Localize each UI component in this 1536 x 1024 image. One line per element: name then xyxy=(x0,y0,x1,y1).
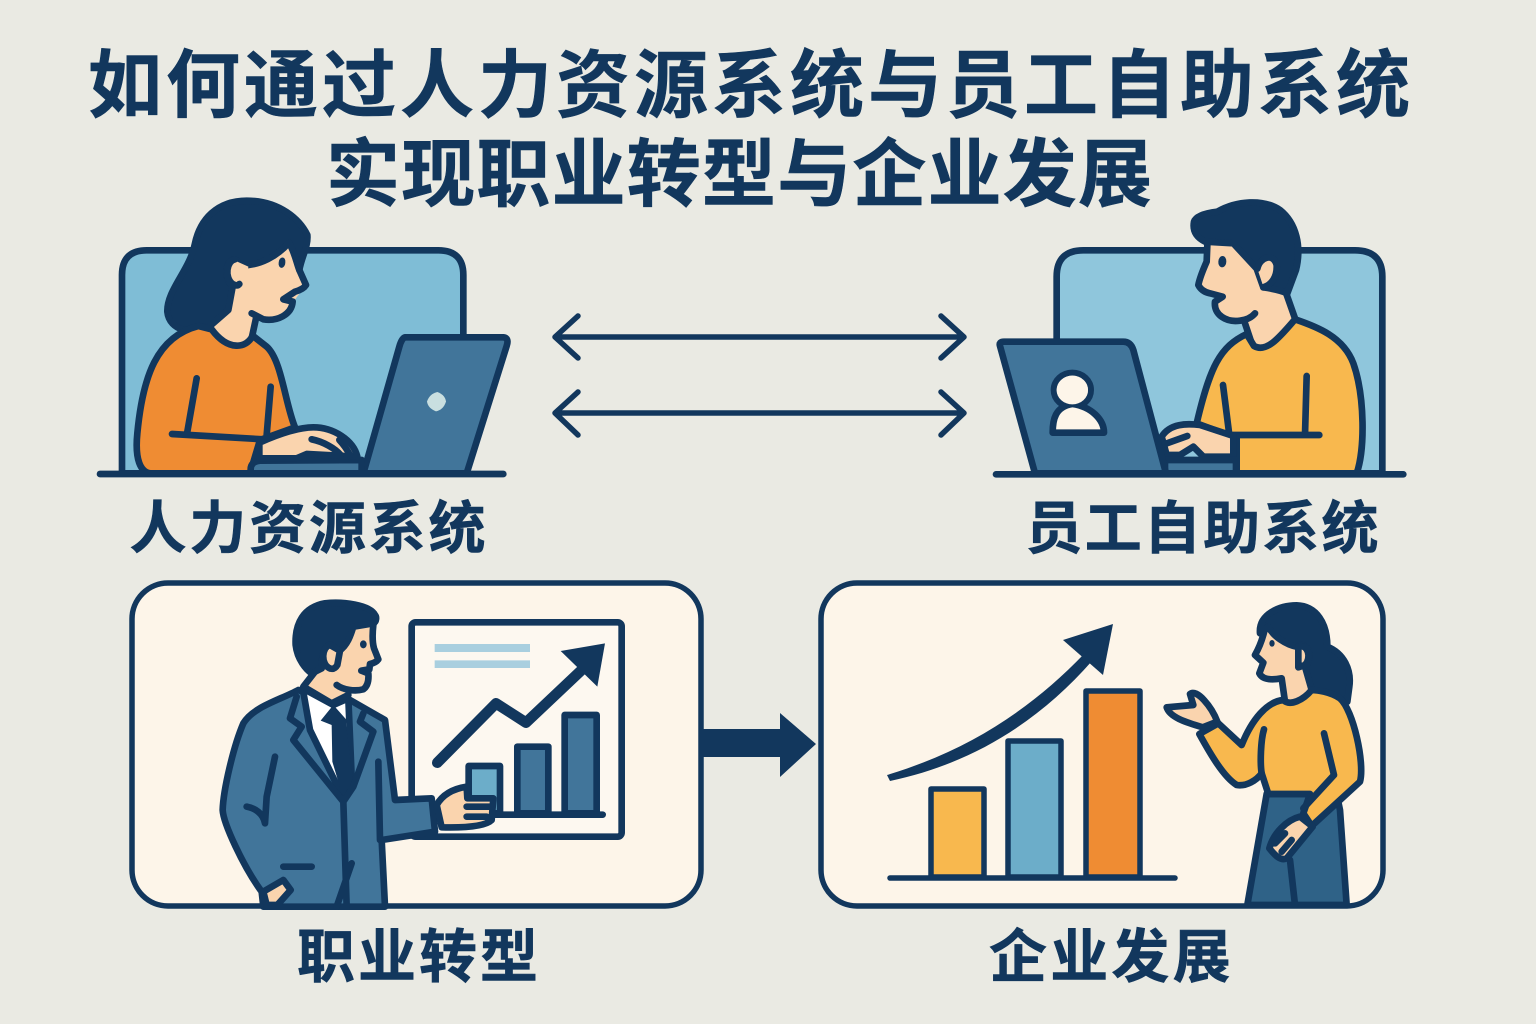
title: 实现职业转型与企业发展 xyxy=(326,133,1153,216)
label: career transformation: 职业转型 xyxy=(297,925,541,990)
arrow: career transformation to enterprise development xyxy=(703,713,816,777)
woman at laptop xyxy=(137,201,362,473)
chart board xyxy=(412,622,622,837)
title: 如何通过人力资源系统与员工自助系统 xyxy=(88,44,1414,127)
laptop with user icon xyxy=(1000,342,1166,473)
desk line xyxy=(996,464,1403,484)
man at laptop xyxy=(1162,202,1363,473)
woman gesturing xyxy=(1167,605,1361,905)
label: employee self-service system: 员工自助系统 xyxy=(1026,497,1381,561)
blue backdrop xyxy=(1057,250,1382,473)
bar chart with rising arrow xyxy=(887,624,1175,878)
panel: enterprise development xyxy=(821,583,1383,906)
laptop with logo xyxy=(363,337,507,473)
blue backdrop xyxy=(122,250,463,473)
panel: career transformation xyxy=(132,583,701,907)
man in suit xyxy=(223,603,493,907)
desk line xyxy=(100,464,503,484)
panel: HR system illustration xyxy=(100,201,507,474)
title xyxy=(88,44,1414,216)
label: HR system: 人力资源系统 xyxy=(130,497,488,561)
label: enterprise development: 企业发展 xyxy=(989,925,1234,990)
panel: employee self-service illustration xyxy=(996,202,1403,474)
arrows: two-way data exchange xyxy=(555,316,964,435)
